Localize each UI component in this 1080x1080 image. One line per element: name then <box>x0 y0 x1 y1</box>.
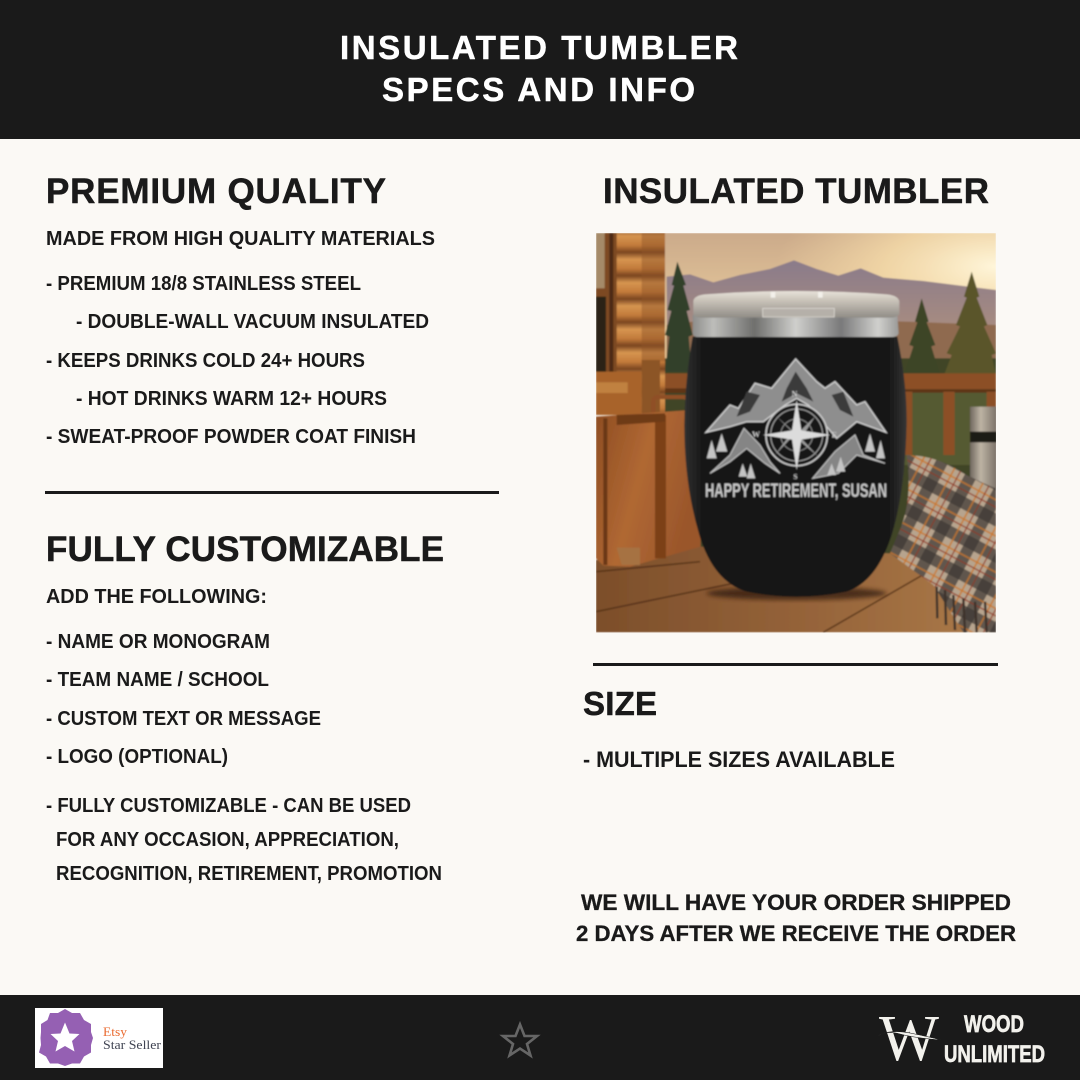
engraved message: HAPPY RETIREMENT, SUSAN <box>705 481 887 502</box>
panel: fully customizable <box>46 530 444 885</box>
steel rim <box>693 315 899 337</box>
callout: shipping note: WE WILL HAVE YOUR ORDER SHIPPED <box>581 890 1011 915</box>
pine trees <box>665 262 996 375</box>
heading: size: SIZE <box>583 685 657 722</box>
text: size availability: - MULTIPLE SIZES AVAILABLE <box>583 747 895 772</box>
clear lid <box>693 291 899 318</box>
heading: insulated tumbler: INSULATED TUMBLER <box>603 172 989 211</box>
text: customization options list: RECOGNITION, RETIREMENT, PROMOTION <box>56 863 442 885</box>
shadow under tumbler <box>707 587 887 600</box>
tumbler body <box>684 337 907 597</box>
badge: Etsy Star Seller: Etsy <box>103 1024 128 1039</box>
text: premium quality intro and feature list: - KEEPS DRINKS COLD 24+ HOURS <box>46 350 365 372</box>
badge: Etsy Star Seller <box>35 1008 163 1068</box>
heading: fully customizable: FULLY CUSTOMIZABLE <box>46 530 444 569</box>
plaid blanket <box>890 455 996 632</box>
logo: Wood Unlimited: UNLIMITED <box>944 1041 1045 1068</box>
icon: outlined star <box>503 1024 537 1056</box>
laser engraving: mountains and compass <box>706 359 886 481</box>
panel: premium quality <box>46 172 435 448</box>
icon: serif W monogram with swoosh: W <box>879 1002 940 1075</box>
thermos <box>970 407 997 488</box>
text: customization options list: - NAME OR MONOGRAM <box>46 631 270 653</box>
railing <box>660 373 996 458</box>
logo: Wood Unlimited <box>878 1002 1045 1075</box>
text: customization options list: - CUSTOM TEXT OR MESSAGE <box>46 708 321 730</box>
text: premium quality intro and feature list <box>46 228 435 448</box>
heading: premium quality: PREMIUM QUALITY <box>46 172 386 211</box>
text: premium quality intro and feature list: - DOUBLE-WALL VACUUM INSULATED <box>76 311 429 333</box>
text: customization options list: - TEAM NAME / SCHOOL <box>46 669 269 691</box>
text: customization options list: - LOGO (OPTIONAL) <box>46 746 228 768</box>
text: premium quality intro and feature list: - HOT DRINKS WARM 12+ HOURS <box>76 388 387 410</box>
text: customization options list <box>46 586 442 885</box>
laser engraving: mountains and compass: W <box>752 430 760 439</box>
mountains <box>666 260 996 326</box>
callout: shipping note: 2 DAYS AFTER WE RECEIVE THE ORDER <box>576 921 1016 946</box>
header band with title: SPECS AND INFO <box>382 71 695 108</box>
logo: Wood Unlimited: WOOD <box>964 1011 1024 1038</box>
footer band <box>0 995 1080 1080</box>
log cabin wall <box>616 233 666 414</box>
text: premium quality intro and feature list: MADE FROM HIGH QUALITY MATERIALS <box>46 228 435 250</box>
callout: shipping note <box>576 890 1016 946</box>
laser engraving: mountains and compass: E <box>832 431 837 440</box>
header band with title: INSULATED TUMBLER <box>340 29 738 66</box>
text: customization options list: ADD THE FOLLOWING: <box>46 586 267 608</box>
header band with title <box>0 0 1080 139</box>
laser engraving: mountains and compass: N <box>792 390 798 399</box>
suitcase <box>596 397 701 567</box>
text: customization options list: - FULLY CUSTOMIZABLE - CAN BE USED <box>46 795 411 817</box>
text: premium quality intro and feature list: - PREMIUM 18/8 STAINLESS STEEL <box>46 273 361 295</box>
badge: Etsy Star Seller: Star Seller <box>103 1037 162 1052</box>
sky <box>664 233 996 360</box>
laser engraving: mountains and compass: S <box>793 472 797 481</box>
icon: purple scalloped badge with star <box>39 1009 93 1066</box>
text: customization options list: FOR ANY OCCASION, APPRECIATION, <box>56 829 399 851</box>
text: premium quality intro and feature list: - SWEAT-PROOF POWDER COAT FINISH <box>46 426 416 448</box>
table top <box>596 547 996 632</box>
product photo: engraved tumbler on cabin porch <box>596 233 997 632</box>
